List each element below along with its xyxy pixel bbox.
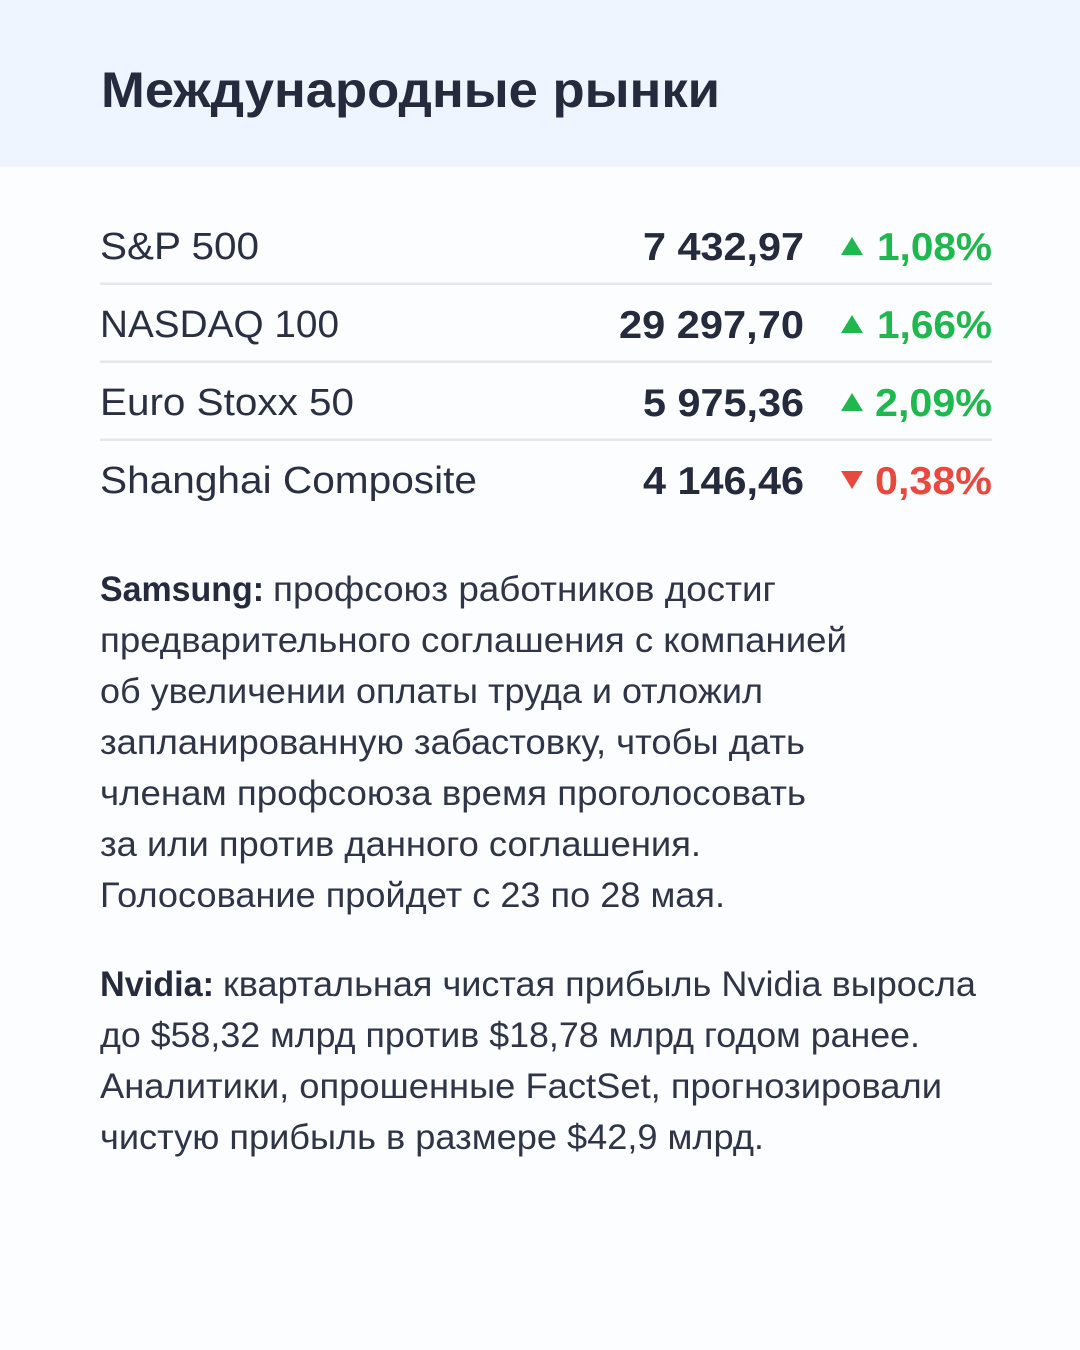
row: S&P 500 xyxy=(100,226,992,269)
text block: Nvidia: Nvidia: xyxy=(100,965,214,1004)
row: NASDAQ 100: 1,66% xyxy=(877,304,992,347)
row: Euro Stoxx 50: 5 975,36 xyxy=(643,382,804,425)
row: Shanghai Composite: Shanghai Composite xyxy=(100,460,477,502)
row: Shanghai Composite: 4 146,46 xyxy=(643,460,804,503)
row: S&P 500: S&P 500 xyxy=(100,226,259,268)
text block: Nvidia: Аналитики, опрошенные FactSet, прогнозировали xyxy=(100,1067,942,1106)
text block: Samsung xyxy=(100,570,847,915)
row: S&P 500: 1,08% xyxy=(877,226,992,269)
row: Shanghai Composite: 0,38% xyxy=(875,460,992,503)
row: NASDAQ 100 xyxy=(100,304,992,347)
text block: Samsung: запланированную забастовку, чтобы дать xyxy=(100,723,805,762)
market table xyxy=(100,226,992,503)
row: NASDAQ 100: 29 297,70 xyxy=(619,304,804,347)
row: NASDAQ 100: NASDAQ 100 xyxy=(100,304,339,346)
text block: Samsung: предварительного соглашения с компанией xyxy=(100,621,847,660)
text block: Nvidia xyxy=(100,965,977,1157)
row: Euro Stoxx 50: 2,09% xyxy=(875,382,992,425)
row: Shanghai Composite xyxy=(100,460,992,503)
row: S&P 500: 7 432,97 xyxy=(643,226,804,269)
header band xyxy=(0,0,1080,167)
row: Euro Stoxx 50: Euro Stoxx 50 xyxy=(100,382,354,424)
text block: Nvidia: чистую прибыль в размере $42,9 млрд. xyxy=(100,1118,764,1157)
row: Euro Stoxx 50 xyxy=(100,382,992,425)
text block: Nvidia: до $58,32 млрд против $18,78 млрд годом ранее. xyxy=(100,1016,920,1055)
text block: Samsung: членам профсоюза время проголосовать xyxy=(100,774,806,813)
text block: Samsung: за или против данного соглашения. xyxy=(100,825,701,864)
text block: Nvidia: квартальная чистая прибыль Nvidia выросла xyxy=(223,965,977,1004)
text block: Samsung: об увеличении оплаты труда и отложил xyxy=(100,672,763,711)
text block: Samsung: Голосование пройдет с 23 по 28 мая. xyxy=(100,876,725,915)
text block: Samsung: профсоюз работников достиг xyxy=(273,570,776,609)
title: Международные рынки xyxy=(101,62,720,118)
text block: Samsung: Samsung: xyxy=(100,570,264,609)
